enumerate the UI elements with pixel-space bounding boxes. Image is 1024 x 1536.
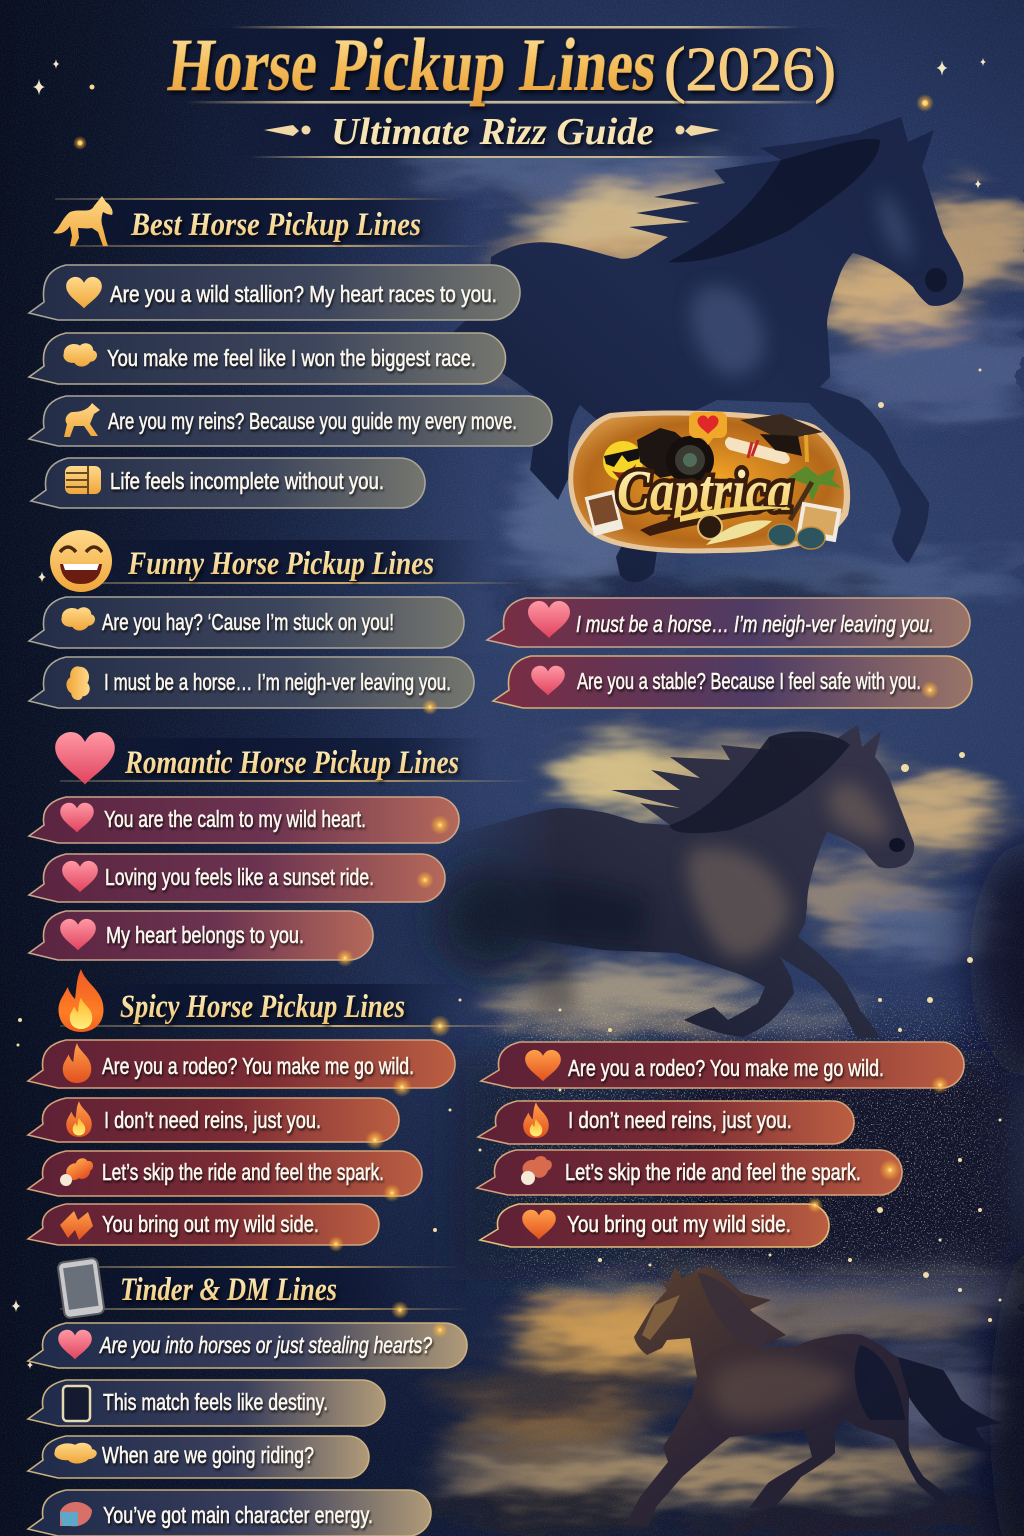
heading: best	[50, 196, 490, 247]
bubble: reins left	[28, 1098, 399, 1142]
title band	[164, 22, 850, 158]
logo icons	[585, 412, 842, 542]
bubble: wild side right: You bring out my wild side.	[567, 1211, 791, 1237]
bubble: calm: You are the calm to my wild heart.	[104, 806, 366, 832]
bubble: sunset ride	[29, 854, 445, 902]
bubble: reins right	[478, 1101, 854, 1144]
bubble: wild side left: You bring out my wild side.	[102, 1211, 319, 1237]
bubble: main character: You’ve got main character energy.	[103, 1502, 373, 1528]
bubble: destiny: This match feels like destiny.	[103, 1389, 328, 1415]
bubble: biggest race: You make me feel like I won the biggest race.	[107, 345, 476, 371]
bubble: reins left: I don’t need reins, just you.	[104, 1107, 321, 1133]
heading: romantic	[55, 732, 530, 785]
subtitle	[264, 111, 720, 153]
logo wordmark: Captrica	[617, 458, 792, 523]
bubble: neigh-ver left	[29, 657, 474, 708]
heading: funny	[50, 530, 530, 592]
subtitle: Ultimate Rizz Guide	[331, 111, 654, 153]
bubble: reins: Are you my reins? Because you guide my every move.	[108, 408, 517, 434]
main title: Horse Pickup Lines	[164, 22, 661, 107]
bubble: spark right	[477, 1150, 902, 1195]
title year: (2026)	[664, 36, 836, 104]
bubble: stable	[493, 656, 972, 708]
panel: romantic horse pickup lines	[29, 732, 530, 960]
bubble: incomplete	[31, 458, 425, 508]
bubble: destiny	[28, 1380, 385, 1426]
bubble: wild stallion: Are you a wild stallion? My heart races to you.	[110, 281, 497, 307]
bubble: sunset ride: Loving you feels like a sunset ride.	[105, 864, 374, 890]
bubble: wild side right	[480, 1204, 829, 1247]
gold dust sparkles	[16, 368, 1002, 1322]
bubble: heart belongs	[29, 911, 373, 960]
bubble: wild stallion	[29, 265, 520, 320]
heading: spicy: Spicy Horse Pickup Lines	[120, 989, 405, 1025]
gold glints on bubbles	[328, 681, 949, 1338]
bubble: neigh-ver right	[487, 598, 970, 647]
bubble: spark left: Let’s skip the ride and feel the spark.	[102, 1159, 384, 1185]
bubble: incomplete: Life feels incomplete without you.	[110, 468, 384, 494]
bubble: calm	[29, 797, 459, 843]
bubble: riding	[28, 1436, 369, 1478]
panel: best horse pickup lines	[29, 196, 552, 508]
bubble: stealing hearts: Are you into horses or just stealing hearts?	[98, 1332, 432, 1358]
bubble: rodeo right	[481, 1042, 964, 1088]
bubble: biggest race	[29, 333, 506, 384]
bubble: hay: Are you hay? ‘Cause I’m stuck on you!	[102, 609, 394, 635]
logo details: swoosh, feather, sunglasses	[640, 505, 825, 549]
panel: spicy horse pickup lines	[28, 969, 964, 1247]
bubble: rodeo left: Are you a rodeo? You make me go wild.	[102, 1053, 414, 1079]
logo badge: Captrica	[568, 411, 850, 553]
bubble: neigh-ver left: I must be a horse… I’m neigh-ver leaving you.	[104, 669, 451, 695]
heading: best: Best Horse Pickup Lines	[130, 207, 421, 243]
heading: spicy	[58, 969, 530, 1032]
bubble: rodeo right: Are you a rodeo? You make me go wild.	[568, 1055, 884, 1081]
horse silhouette: middle	[440, 725, 914, 1038]
horse silhouette: bottom	[626, 1267, 1002, 1527]
bubble: hay	[29, 597, 464, 648]
bubble: main character	[28, 1490, 431, 1536]
bubble: reins	[29, 396, 552, 446]
panel: funny horse pickup lines	[29, 530, 972, 708]
horse silhouette: top	[440, 117, 963, 582]
heading: tinder: Tinder & DM Lines	[120, 1272, 337, 1308]
bubble: spark left	[28, 1151, 422, 1196]
bubble: heart belongs: My heart belongs to you.	[106, 922, 304, 948]
heading: romantic: Romantic Horse Pickup Lines	[124, 745, 459, 781]
heading: funny: Funny Horse Pickup Lines	[127, 546, 434, 582]
bubble: wild side left	[28, 1204, 379, 1245]
panel: tinder and DM lines	[28, 1257, 470, 1536]
bubble: rodeo left	[28, 1040, 455, 1088]
bubble: stealing hearts	[28, 1323, 467, 1368]
bubble: reins right: I don’t need reins, just you.	[568, 1107, 792, 1133]
heading: tinder	[57, 1257, 470, 1319]
bubble: riding: When are we going riding?	[102, 1442, 314, 1468]
bubble: spark right: Let’s skip the ride and feel the spark.	[565, 1159, 861, 1185]
